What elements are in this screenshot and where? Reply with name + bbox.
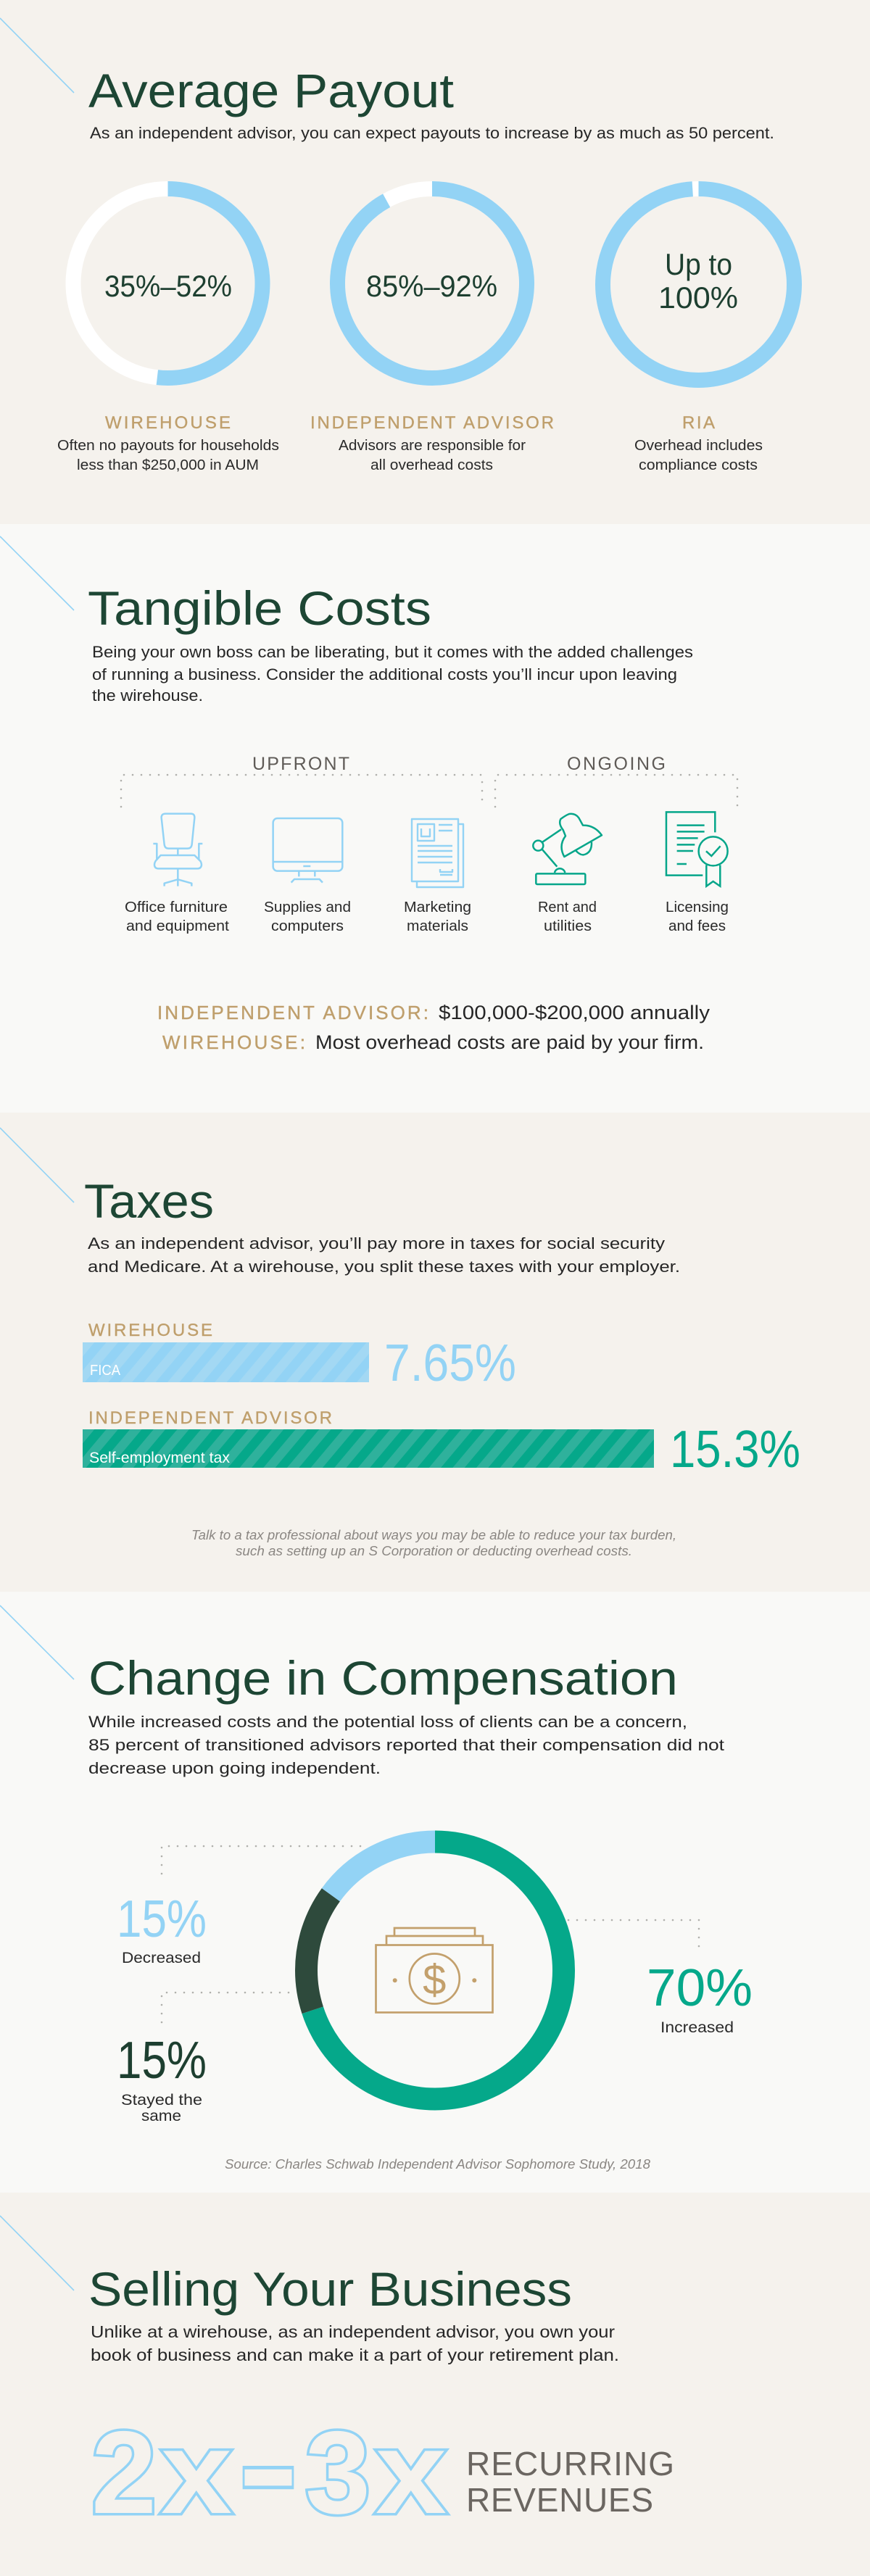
label: rent: Rent and bbox=[538, 899, 597, 915]
caption: ria: compliance costs bbox=[639, 457, 758, 473]
bracket: ongoing bbox=[495, 754, 737, 807]
label: rent bbox=[538, 899, 597, 934]
intro text: taxes: As an independent advisor, you’ll pay more in taxes for social security bbox=[88, 1234, 665, 1252]
callout: decreased bbox=[117, 1846, 360, 1966]
label: supplies bbox=[264, 899, 351, 934]
bracket: ongoing: ONGOING bbox=[567, 754, 666, 774]
note: tax professional: such as setting up an S Corporation or deducting overhead costs. bbox=[236, 1544, 632, 1558]
caption: independent advisor: all overhead costs bbox=[370, 457, 493, 473]
panel: taxes bbox=[0, 1113, 870, 1592]
source note: Source: Charles Schwab Independent Advisor Sophomore Study, 2018 bbox=[225, 2157, 650, 2172]
callout: stayed the same: 15% bbox=[117, 2032, 207, 2090]
heading: tangible costs: Tangible Costs bbox=[88, 581, 431, 635]
caption: independent advisor: Advisors are responsible for bbox=[339, 438, 526, 454]
note: tax professional bbox=[191, 1528, 676, 1558]
bar: independent advisor self-employment tax: Self-employment tax bbox=[89, 1450, 230, 1466]
big figure: 2x-3x: x bbox=[161, 2407, 232, 2538]
label: supplies: computers bbox=[271, 918, 344, 934]
bar: independent advisor self-employment tax: INDEPENDENT ADVISOR bbox=[88, 1408, 332, 1428]
intro text: selling bbox=[91, 2322, 619, 2364]
big figure: 2x-3x bbox=[91, 2373, 447, 2556]
bracket: upfront bbox=[121, 754, 482, 807]
ring chart: ria: 100% bbox=[658, 281, 738, 315]
intro text: tangible costs: Being your own boss can be liberating, but it comes with the added challenges bbox=[92, 643, 693, 661]
callout: increased: Increased bbox=[660, 2019, 734, 2036]
panel: selling your business bbox=[0, 2193, 870, 2576]
donut chart: compensation change bbox=[306, 1842, 564, 2099]
label: supplies: Supplies and bbox=[264, 899, 351, 915]
intro text: compensation: 85 percent of transitioned advisors reported that their compensation did not bbox=[88, 1736, 724, 1754]
bar: independent advisor self-employment tax: 15.3% bbox=[670, 1421, 800, 1479]
icon: office chair bbox=[153, 814, 202, 886]
label: marketing: materials bbox=[407, 918, 468, 934]
icon: money stack bbox=[376, 1928, 493, 2012]
ring chart: ria bbox=[603, 188, 795, 380]
label: recurring revenues: REVENUES bbox=[466, 2481, 653, 2519]
label: office furniture bbox=[125, 899, 229, 934]
callout: increased: 70% bbox=[647, 1959, 753, 2017]
icon: license certificate bbox=[666, 812, 728, 886]
intro text: taxes bbox=[88, 1234, 680, 1276]
big figure: 2x-3x: 2 bbox=[91, 2407, 157, 2538]
caption: ria: RIA bbox=[682, 413, 715, 433]
caption: wirehouse: less than $250,000 in AUM bbox=[77, 457, 259, 473]
label: recurring revenues: RECURRING bbox=[466, 2445, 674, 2482]
summary: cost comparison: INDEPENDENT ADVISOR: bbox=[157, 1002, 428, 1023]
intro text: compensation: decrease upon going independent. bbox=[88, 1759, 381, 1777]
heading: taxes: Taxes bbox=[84, 1174, 214, 1228]
callout: decreased: Decreased bbox=[122, 1950, 201, 1966]
callout: stayed the same: Stayed the bbox=[121, 2092, 202, 2108]
caption: ria bbox=[634, 413, 763, 473]
caption: independent advisor bbox=[310, 413, 554, 473]
heading: average payout: Average Payout bbox=[88, 64, 454, 117]
label: marketing: Marketing bbox=[404, 899, 471, 915]
big figure: 2x-3x: – bbox=[242, 2373, 294, 2556]
intro text: average payout: As an independent advisor, you can expect payouts to increase by as much as 50 percent. bbox=[90, 124, 774, 142]
caption: wirehouse: WIREHOUSE bbox=[105, 413, 231, 433]
callout: increased bbox=[568, 1920, 753, 2036]
label: licensing: Licensing bbox=[666, 899, 729, 915]
bar: independent advisor self-employment tax bbox=[83, 1408, 800, 1479]
ring chart: ria: Up to bbox=[665, 247, 732, 281]
callout: decreased: 15% bbox=[117, 1890, 207, 1948]
summary: cost comparison: Most overhead costs are paid by your firm. bbox=[315, 1031, 704, 1053]
summary: cost comparison: $100,000-$200,000 annually bbox=[439, 1002, 710, 1023]
heading: change in compensation: Change in Compensation bbox=[88, 1651, 678, 1705]
callout: stayed the same bbox=[117, 1993, 289, 2124]
intro text: tangible costs bbox=[92, 643, 693, 705]
label: licensing: and fees bbox=[668, 918, 726, 934]
icon: computer monitor bbox=[273, 818, 342, 883]
intro text: tangible costs: the wirehouse. bbox=[92, 686, 203, 705]
bar: wirehouse fica bbox=[83, 1321, 516, 1392]
label: licensing bbox=[666, 899, 729, 934]
caption: wirehouse: Often no payouts for households bbox=[57, 438, 279, 454]
bar: wirehouse fica: 7.65% bbox=[384, 1334, 516, 1392]
intro text: tangible costs: of running a business. Consider the additional costs you’ll incur upon leaving bbox=[92, 665, 677, 684]
intro text: compensation bbox=[88, 1713, 724, 1777]
icon: desk lamp bbox=[533, 814, 602, 884]
panel: average payout bbox=[0, 0, 870, 524]
ring chart: independent advisor: 85%–92% bbox=[366, 269, 497, 303]
heading: selling your business: Selling Your Business bbox=[88, 2262, 572, 2316]
label: office furniture: and equipment bbox=[126, 918, 229, 934]
note: tax professional: Talk to a tax professional about ways you may be able to reduce your tax burden, bbox=[191, 1528, 676, 1542]
callout: stayed the same: same bbox=[141, 2108, 181, 2124]
panel: tangible costs bbox=[0, 524, 870, 1113]
bar: wirehouse fica: FICA bbox=[90, 1363, 121, 1379]
summary: cost comparison: WIREHOUSE: bbox=[162, 1031, 305, 1053]
label: office furniture: Office furniture bbox=[125, 899, 228, 915]
ring chart: independent advisor bbox=[338, 188, 526, 378]
intro text: taxes: and Medicare. At a wirehouse, you split these taxes with your employer. bbox=[88, 1258, 680, 1276]
intro text: compensation: While increased costs and the potential loss of clients can be a concern, bbox=[88, 1713, 687, 1731]
label: recurring revenues bbox=[466, 2445, 674, 2519]
caption: ria: Overhead includes bbox=[634, 438, 763, 454]
summary: cost comparison bbox=[157, 1002, 710, 1053]
ring chart: wirehouse bbox=[73, 188, 262, 378]
ring chart: wirehouse: 35%–52% bbox=[104, 269, 232, 303]
panel: change in compensation bbox=[0, 1592, 870, 2193]
big figure: 2x-3x: 3 bbox=[305, 2407, 370, 2538]
label: marketing bbox=[404, 899, 471, 934]
caption: independent advisor: INDEPENDENT ADVISOR bbox=[310, 413, 554, 433]
bar: wirehouse fica: WIREHOUSE bbox=[88, 1321, 212, 1340]
icon: money stack: $ bbox=[423, 1956, 446, 2003]
intro text: selling: Unlike at a wirehouse, as an independent advisor, you own your bbox=[91, 2322, 615, 2341]
bracket: upfront: UPFRONT bbox=[252, 754, 349, 774]
big figure: 2x-3x: x bbox=[376, 2407, 447, 2538]
label: rent: utilities bbox=[544, 918, 592, 934]
intro text: selling: book of business and can make it a part of your retirement plan. bbox=[91, 2346, 619, 2364]
caption: wirehouse bbox=[57, 413, 279, 473]
icon: marketing documents bbox=[412, 819, 463, 887]
